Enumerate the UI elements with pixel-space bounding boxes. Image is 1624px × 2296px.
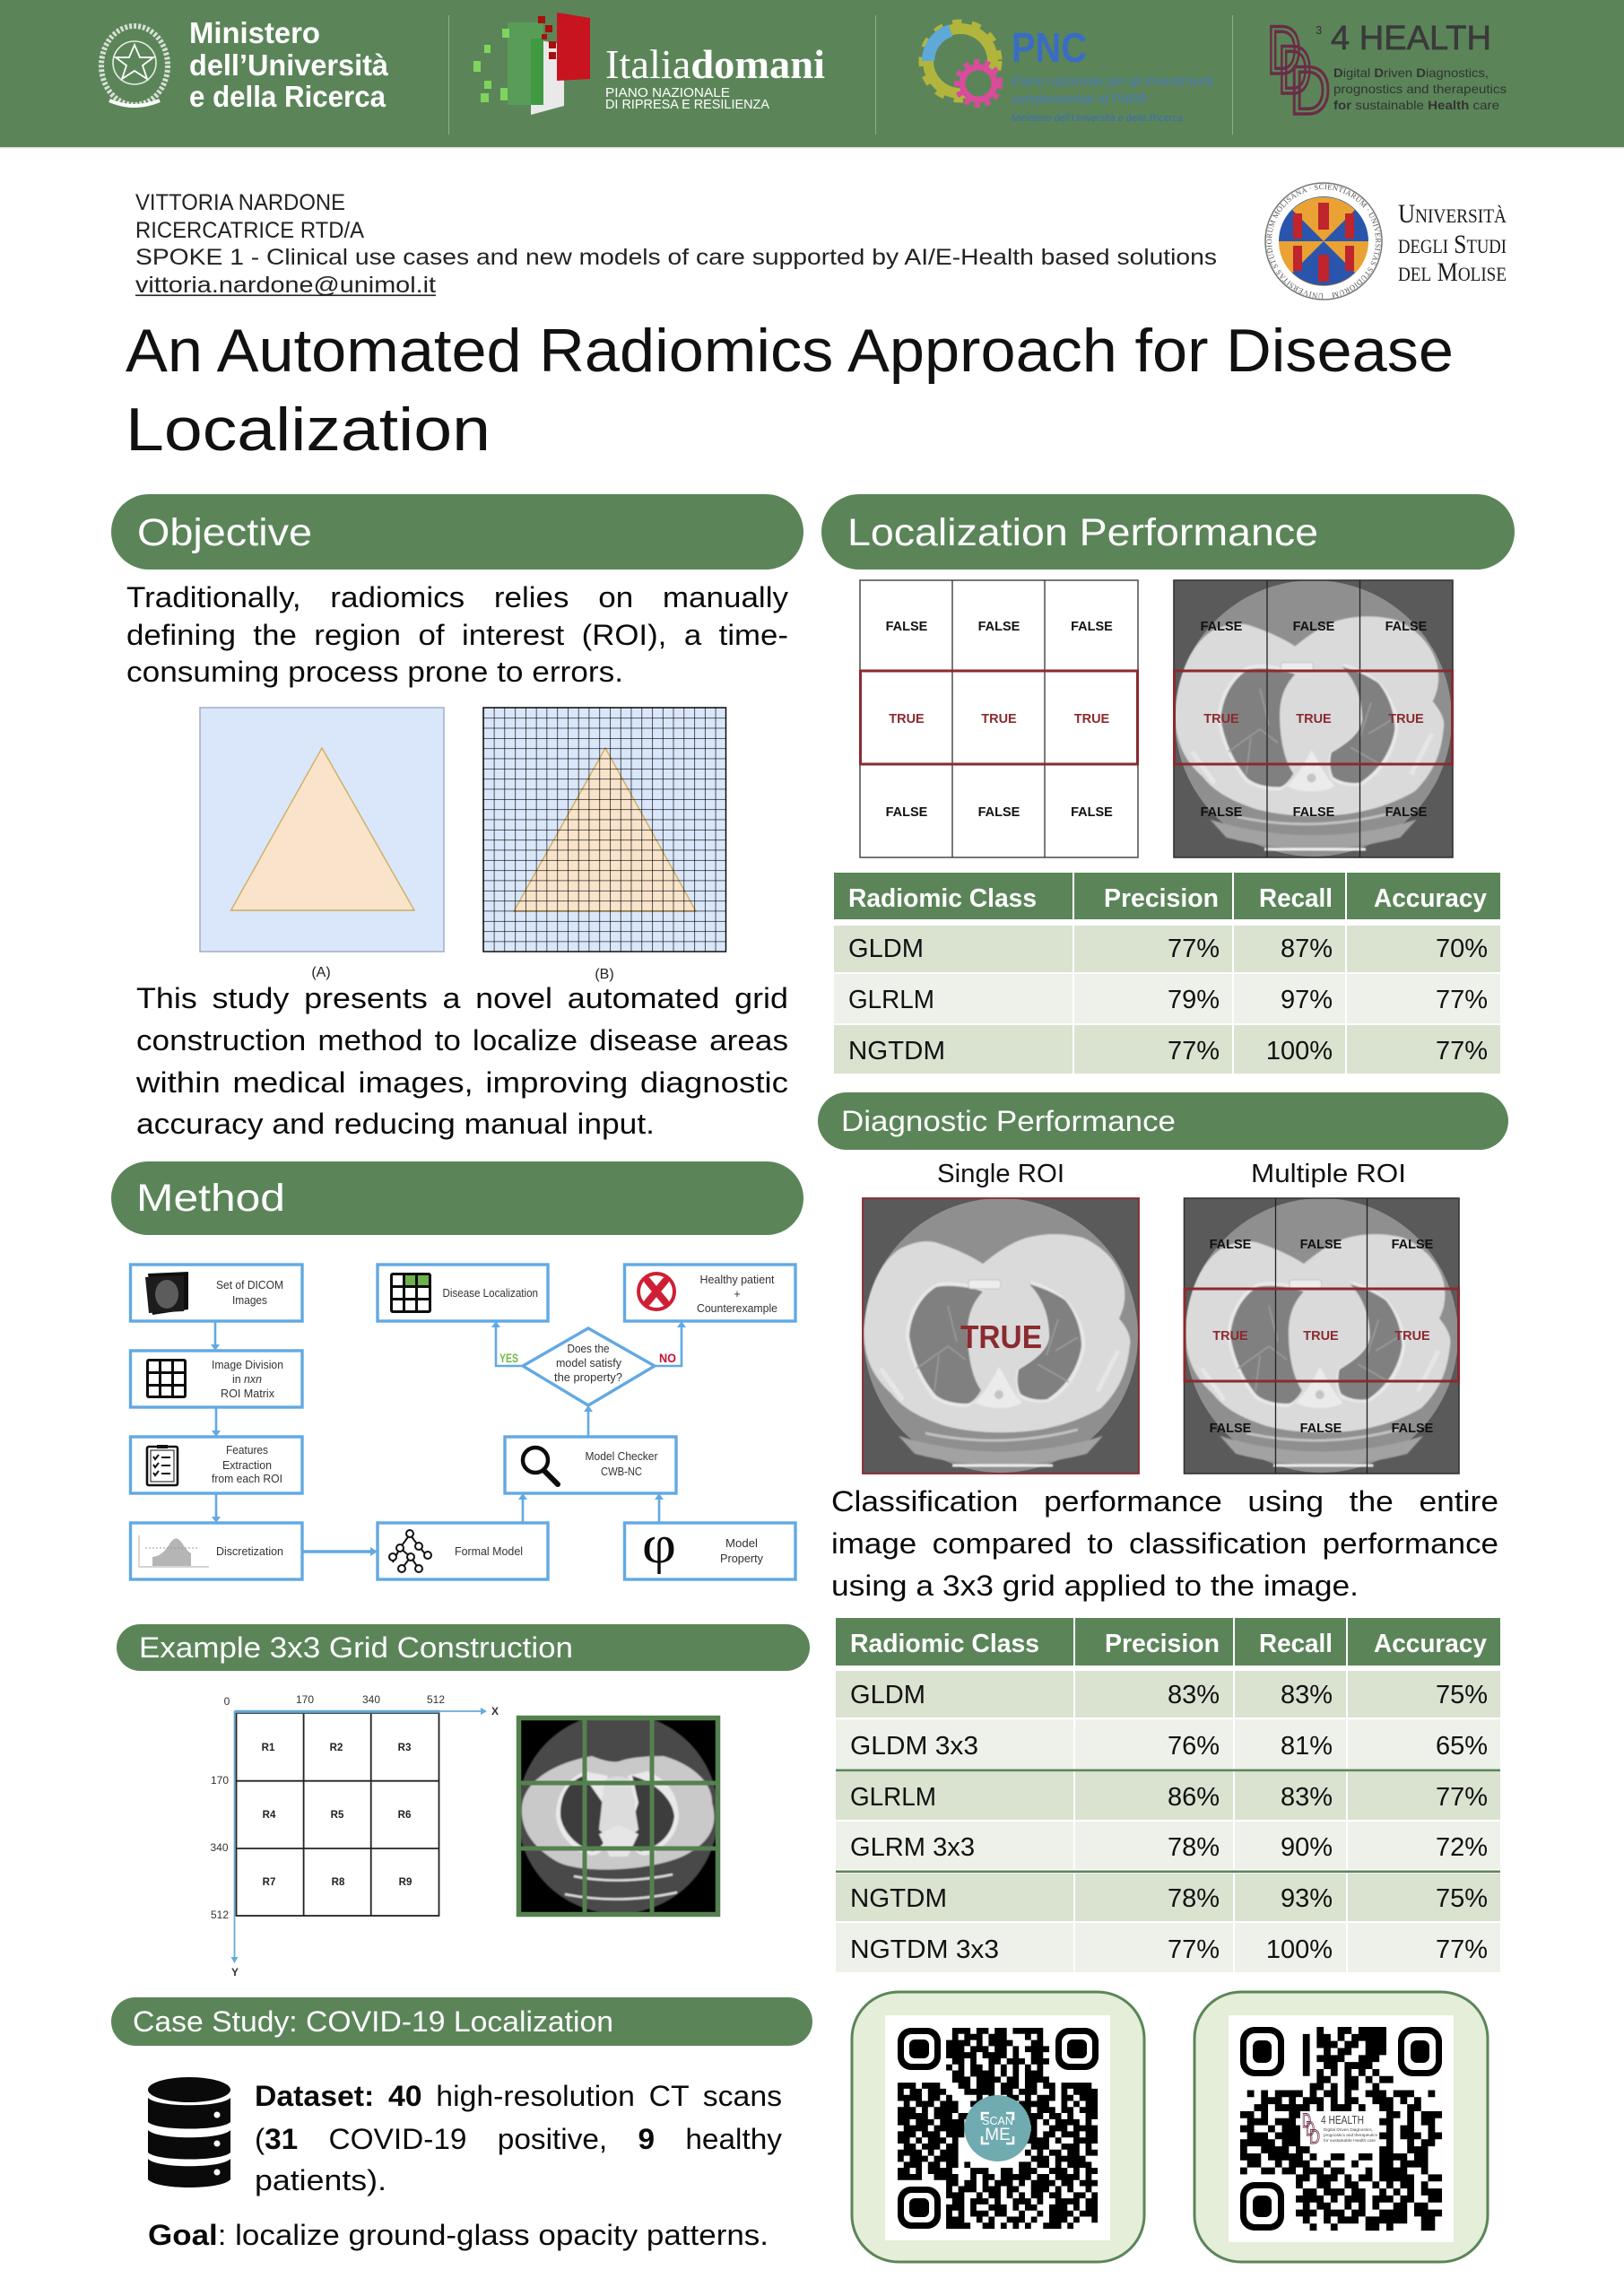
heading: Localization Performance xyxy=(821,494,1515,570)
grid diagram with axes: R7 xyxy=(263,1877,275,1888)
logo: Ministero dell'Università e della Ricerca: Ministero xyxy=(189,16,320,49)
classification text: Classification performance using the entire xyxy=(831,1485,1498,1518)
icon: database xyxy=(148,2077,230,2187)
box: Healthy patient and Counterexample: Counterexample xyxy=(697,1302,777,1315)
table: diagnostic metrics: 77% xyxy=(1436,1935,1488,1964)
table: diagnostic metrics: GLRM 3x3 xyxy=(850,1833,975,1862)
logo: D3 4 Health: prognostics and therapeutics xyxy=(1333,82,1507,96)
table: diagnostic metrics: 65% xyxy=(1436,1732,1488,1761)
decision diamond: the property? xyxy=(554,1371,622,1384)
table: diagnostic metrics: 72% xyxy=(1436,1833,1488,1862)
heading: Example 3x3 Grid Construction: Example 3x3 Grid Construction xyxy=(139,1631,573,1664)
box: Model Checker: CWB-NC xyxy=(601,1465,642,1478)
grid diagram with axes: R6 xyxy=(398,1810,411,1821)
true/false grid: FALSE xyxy=(978,805,1020,820)
table: diagnostic metrics: NGTDM xyxy=(850,1884,947,1913)
box: Disease Localization: Disease Localization xyxy=(443,1287,538,1300)
objective text: consuming process prone to errors. xyxy=(126,656,623,688)
author block xyxy=(135,190,1217,298)
panel: diagnostic performance xyxy=(818,1092,1508,1972)
study description text: within medical images, improving diagnostic xyxy=(135,1066,788,1099)
grid diagram with axes: X xyxy=(491,1705,499,1718)
grid diagram with axes: 512 xyxy=(211,1909,229,1921)
logo: PNC xyxy=(923,23,1213,124)
table: diagnostic metrics: 81% xyxy=(1281,1732,1333,1761)
objective text: defining the region of interest (ROI), a time- xyxy=(126,619,788,651)
classification text: using a 3x3 grid applied to the image. xyxy=(831,1570,1359,1602)
logo: D3 4 Health: Digital Driven Diagnostics, xyxy=(1333,65,1489,80)
CT scan with true/false grid: FALSE xyxy=(1293,620,1335,634)
diagram A: ROI triangle: (A) xyxy=(311,965,331,980)
table: diagnostic metrics: Accuracy xyxy=(1374,1630,1487,1658)
CT scan: multiple ROI: FALSE xyxy=(1300,1238,1342,1252)
CT scan with true/false grid: FALSE xyxy=(1201,620,1243,634)
table: localization metrics: 100% xyxy=(1266,1037,1333,1065)
D3 4 Health badge: D xyxy=(1302,2109,1311,2132)
CT scan: multiple ROI: FALSE xyxy=(1392,1238,1434,1252)
grid diagram with axes: 170 xyxy=(296,1693,314,1706)
diagram B: ROI triangle with grid xyxy=(483,708,726,982)
table: diagnostic metrics: 86% xyxy=(1168,1783,1220,1812)
table: diagnostic metrics: 77% xyxy=(1436,1783,1488,1812)
D3 4 Health badge: 4 HEALTH xyxy=(1321,2113,1364,2126)
table: diagnostic metrics xyxy=(836,1618,1500,1972)
label: Multiple ROI: Multiple ROI xyxy=(1251,1160,1406,1188)
objective text: Traditionally, radiomics relies on manually xyxy=(126,581,788,613)
CT scan with true/false grid: TRUE xyxy=(1296,712,1332,726)
D3 4 Health badge: Digital Driven Diagnostics, xyxy=(1324,2127,1373,2132)
author block: vittoria.nardone@unimol.it xyxy=(135,273,436,298)
logo: D3 4 Health: D xyxy=(1267,13,1301,89)
logo: Università degli Studi del Molise: DEL MOLISE xyxy=(1398,257,1507,287)
CT scan: multiple ROI: FALSE xyxy=(1300,1422,1342,1436)
grid diagram with axes: R8 xyxy=(332,1877,345,1888)
title: Localization xyxy=(126,396,491,464)
heading: Method: Method xyxy=(136,1177,285,1220)
QR finder patterns xyxy=(898,2028,1099,2229)
box: Features Extraction: Features xyxy=(226,1444,268,1457)
CT scan: multiple ROI: FALSE xyxy=(1392,1422,1434,1436)
logo: Italiadomani: DI RIPRESA E RESILIENZA xyxy=(605,98,769,112)
scan me badge xyxy=(965,2095,1031,2161)
logo: Ministero dell'Università e della Ricerca xyxy=(101,16,389,113)
title: An Automated Radiomics Approach for Disease xyxy=(126,317,1454,385)
dataset text xyxy=(255,2080,782,2196)
table: diagnostic metrics: Radiomic Class xyxy=(850,1630,1039,1658)
box: Set of DICOM Images: Images xyxy=(232,1294,267,1307)
dataset text: patients). xyxy=(255,2164,386,2196)
true/false grid: FALSE xyxy=(1071,805,1113,820)
panel: method xyxy=(111,1161,803,1579)
logo: PNC: PNC xyxy=(1012,24,1087,71)
grid diagram with axes xyxy=(210,1693,499,1979)
box: Discretization xyxy=(131,1523,302,1579)
heading: Objective xyxy=(111,494,803,570)
author block: VITTORIA NARDONE xyxy=(135,190,345,215)
logo: PNC: complementari al PNRR xyxy=(1012,91,1148,106)
QR card: scan me xyxy=(852,1992,1144,2262)
box: Discretization: Discretization xyxy=(216,1545,283,1558)
logo: PNC: Ministero dell’Università e della Ricerca xyxy=(1012,113,1184,124)
heading: Diagnostic Performance: Diagnostic Performance xyxy=(841,1105,1176,1137)
table: diagnostic metrics: 93% xyxy=(1281,1884,1333,1913)
grid diagram with axes: R4 xyxy=(263,1810,276,1821)
heading: Diagnostic Performance xyxy=(818,1092,1508,1150)
logo: Italiadomani xyxy=(473,13,825,115)
CT scan with true/false grid: FALSE xyxy=(1293,805,1335,820)
table: localization metrics: Radiomic Class xyxy=(848,884,1037,913)
diagram A: ROI triangle xyxy=(200,708,444,980)
table: localization metrics xyxy=(834,873,1500,1074)
table: localization metrics: 77% xyxy=(1436,1037,1488,1065)
table: diagnostic metrics: 90% xyxy=(1281,1833,1333,1862)
logo: Ministero dell'Università e della Ricerca: e della Ricerca xyxy=(189,80,386,113)
study description text: construction method to localize disease areas xyxy=(136,1024,788,1057)
header banner xyxy=(0,0,1624,149)
grid diagram with axes: R2 xyxy=(330,1743,343,1753)
CT scan: multiple ROI: TRUE xyxy=(1212,1329,1248,1344)
box: Image Division: in nxn xyxy=(232,1373,262,1386)
heading: Example 3x3 Grid Construction xyxy=(117,1624,810,1671)
grid diagram with axes: R3 xyxy=(398,1743,411,1753)
true/false grid: TRUE xyxy=(981,712,1017,726)
author block: RICERCATRICE RTD/A xyxy=(135,218,364,243)
heading: Method xyxy=(111,1161,803,1235)
QR code modules xyxy=(1240,2031,1442,2227)
logo: D3 4 Health: for sustainable Health care xyxy=(1333,98,1499,112)
table: localization metrics: 97% xyxy=(1281,986,1333,1014)
CT scan with green 3x3 grid xyxy=(517,1713,720,1917)
table: diagnostic metrics: 75% xyxy=(1436,1681,1488,1709)
table: diagnostic metrics: 76% xyxy=(1168,1732,1220,1761)
scan me badge: ME xyxy=(985,2126,1011,2144)
panel: case study xyxy=(111,1997,812,2251)
table: diagnostic metrics: GLRLM xyxy=(850,1783,936,1812)
logo: D3 4 Health: D xyxy=(1290,53,1331,129)
CT scan: multiple ROI: TRUE xyxy=(1394,1329,1430,1344)
true/false grid: TRUE xyxy=(889,712,925,726)
CT scan: multiple ROI xyxy=(1184,1198,1459,1474)
grid diagram with axes: R9 xyxy=(399,1877,412,1888)
box: Model Property xyxy=(624,1515,795,1579)
box: Model Property: φ xyxy=(642,1515,676,1574)
label: Single ROI: Single ROI xyxy=(937,1160,1064,1188)
table: diagnostic metrics: GLDM 3x3 xyxy=(850,1732,978,1761)
table: diagnostic metrics: 78% xyxy=(1168,1833,1220,1862)
panel: example 3x3 grid construction xyxy=(117,1624,810,1979)
table: diagnostic metrics: GLDM xyxy=(850,1681,925,1709)
scan me badge: SCAN xyxy=(982,2115,1013,2127)
table: localization metrics: Precision xyxy=(1104,884,1219,913)
logo: Università degli Studi del Molise xyxy=(1264,182,1507,300)
table: diagnostic metrics: 83% xyxy=(1168,1681,1220,1709)
diagram B: ROI triangle with grid: (B) xyxy=(595,967,614,982)
heading: Case Study xyxy=(111,1997,812,2046)
grid diagram with axes: 340 xyxy=(210,1841,229,1854)
logo: D3 4 Health xyxy=(1267,13,1507,129)
decision diamond xyxy=(499,1328,676,1405)
logo: D3 4 Health: 4 HEALTH xyxy=(1331,20,1491,57)
box: Set of DICOM Images: Set of DICOM xyxy=(216,1279,283,1292)
table: localization metrics: 77% xyxy=(1168,935,1220,963)
CT scan with true/false grid: TRUE xyxy=(1388,712,1424,726)
heading: Localization Performance: Localization Performance xyxy=(847,511,1318,554)
table: localization metrics: 77% xyxy=(1436,986,1488,1014)
box: Image Division xyxy=(131,1351,302,1407)
table: diagnostic metrics: 75% xyxy=(1436,1884,1488,1913)
heading: Objective: Objective xyxy=(137,511,312,554)
panel: localization performance xyxy=(821,494,1515,1074)
box: Features Extraction: from each ROI xyxy=(212,1473,282,1485)
D3 4 Health badge: for sustainable Health care xyxy=(1324,2138,1376,2143)
logo: Università degli Studi del Molise: UNIVERSITAS STUDIORUM MOLISANA · SCIENTIARUM · UNIVERSITAS STUDIORUM xyxy=(1266,184,1381,299)
CT scan with true/false grid: FALSE xyxy=(1385,805,1428,820)
table: diagnostic metrics: NGTDM 3x3 xyxy=(850,1935,999,1964)
logo: Italiadomani: PIANO NAZIONALE xyxy=(605,86,730,100)
table: localization metrics: 79% xyxy=(1168,986,1220,1014)
heading: Case Study: Case Study: COVID-19 Localization xyxy=(133,2005,613,2038)
table: diagnostic metrics: 78% xyxy=(1168,1884,1220,1913)
arrows xyxy=(211,1321,686,1556)
panel: objective xyxy=(111,494,803,1140)
true/false grid xyxy=(860,580,1138,857)
table: localization metrics: Accuracy xyxy=(1374,884,1487,913)
logo: PNC: Piano nazionale per gli investimenti xyxy=(1012,74,1213,88)
logo: D3 4 Health: D xyxy=(1278,32,1312,109)
true/false grid: FALSE xyxy=(1071,620,1113,634)
D3 4 Health badge xyxy=(1300,2109,1379,2148)
table: localization metrics: GLDM xyxy=(848,935,924,963)
grid diagram with axes: 512 xyxy=(427,1693,445,1706)
classification text xyxy=(831,1485,1498,1602)
box: Set of DICOM Images xyxy=(131,1265,302,1321)
grid diagram with axes: Y xyxy=(231,1966,239,1979)
goal text: Goal: localize ground-glass opacity patterns. xyxy=(148,2219,769,2251)
grid diagram with axes: 0 xyxy=(224,1695,230,1708)
grid diagram with axes: 170 xyxy=(211,1774,229,1787)
table: localization metrics: 77% xyxy=(1168,1037,1220,1065)
box: Healthy patient and Counterexample xyxy=(624,1265,795,1321)
CT scan with true/false grid xyxy=(1174,580,1453,857)
logo: Università degli Studi del Molise: DEGLI STUDI xyxy=(1398,230,1507,259)
QR card: D3 4 Health xyxy=(1194,1992,1488,2262)
table: localization metrics: 70% xyxy=(1436,935,1488,963)
CT scan with true/false grid: TRUE xyxy=(1203,712,1239,726)
table: localization metrics: 87% xyxy=(1281,935,1333,963)
objective text xyxy=(126,581,788,688)
decision diamond: YES xyxy=(499,1351,518,1365)
logo: Italiadomani: Italiadomani xyxy=(605,41,825,87)
study description text: accuracy and reducing manual input. xyxy=(136,1108,655,1140)
CT scan: multiple ROI: FALSE xyxy=(1210,1422,1252,1436)
QR finder patterns xyxy=(1240,2027,1442,2231)
study description text xyxy=(135,982,788,1140)
table: localization metrics: Recall xyxy=(1259,884,1333,913)
table: diagnostic metrics: 77% xyxy=(1168,1935,1220,1964)
dataset text: (31 COVID-19 positive, 9 healthy xyxy=(255,2123,782,2155)
box: Formal Model: Formal Model xyxy=(455,1545,523,1558)
decision diamond: model satisfy xyxy=(556,1357,622,1370)
dataset text: Dataset: 40 high-resolution CT scans xyxy=(255,2080,782,2112)
classification text: image compared to classification performance xyxy=(831,1527,1498,1560)
grid diagram with axes: R5 xyxy=(331,1810,344,1821)
author block: SPOKE 1 - Clinical use cases and new models of care supported by AI/E-Health based solutions xyxy=(135,245,1217,270)
flowchart xyxy=(131,1265,795,1579)
D3 4 Health badge: D xyxy=(1306,2118,1315,2140)
table: localization metrics: GLRLM xyxy=(848,986,934,1014)
table: diagnostic metrics: 83% xyxy=(1281,1783,1333,1812)
CT scan with true/false grid: FALSE xyxy=(1385,620,1428,634)
box: Image Division: ROI Matrix xyxy=(221,1387,275,1400)
box: Formal Model xyxy=(378,1523,548,1579)
true/false grid: FALSE xyxy=(886,620,928,634)
grid diagram with axes: 340 xyxy=(362,1693,380,1706)
CT scan: multiple ROI: TRUE xyxy=(1303,1329,1339,1344)
decision diamond: Does the xyxy=(567,1343,610,1355)
grid diagram with axes: R1 xyxy=(262,1743,275,1753)
D3 4 Health badge: prognostics and therapeutics xyxy=(1324,2133,1378,2137)
table: diagnostic metrics: 100% xyxy=(1266,1935,1333,1964)
table: diagnostic metrics: Precision xyxy=(1105,1630,1220,1658)
table: diagnostic metrics: 83% xyxy=(1281,1681,1333,1709)
CT scan with true/false grid: FALSE xyxy=(1201,805,1243,820)
box: Disease Localization xyxy=(378,1265,548,1321)
logo: Ministero dell'Università e della Ricerca: dell’Università xyxy=(189,48,389,82)
box: Healthy patient and Counterexample: + xyxy=(734,1288,741,1300)
true/false grid: FALSE xyxy=(886,805,928,820)
CT scan: single ROI xyxy=(863,1198,1139,1474)
box: Model Checker: Model Checker xyxy=(585,1450,658,1463)
logo: Università degli Studi del Molise: UNIVERSITÀ xyxy=(1398,199,1507,229)
logo: D3 4 Health: 3 xyxy=(1316,23,1322,37)
CT scan: single ROI: TRUE xyxy=(960,1318,1042,1355)
box: Features Extraction: Extraction xyxy=(222,1459,272,1472)
box: Model Property: Model xyxy=(725,1537,758,1550)
QR code modules xyxy=(898,2031,1098,2226)
study description text: This study presents a novel automated grid xyxy=(136,982,788,1014)
decision diamond: NO xyxy=(659,1351,676,1365)
true/false grid: FALSE xyxy=(978,620,1020,634)
true/false grid: TRUE xyxy=(1074,712,1110,726)
box: Model Property: Property xyxy=(720,1552,764,1565)
box: Model Checker xyxy=(505,1437,676,1493)
table: localization metrics: NGTDM xyxy=(848,1037,945,1065)
box: Healthy patient and Counterexample: Healthy patient xyxy=(699,1274,775,1286)
D3 4 Health badge: D xyxy=(1309,2126,1320,2148)
box: Image Division: Image Division xyxy=(212,1359,283,1371)
box: Features Extraction xyxy=(131,1437,302,1493)
table: diagnostic metrics: Recall xyxy=(1259,1630,1333,1658)
CT scan: multiple ROI: FALSE xyxy=(1210,1238,1252,1252)
title xyxy=(126,317,1454,464)
